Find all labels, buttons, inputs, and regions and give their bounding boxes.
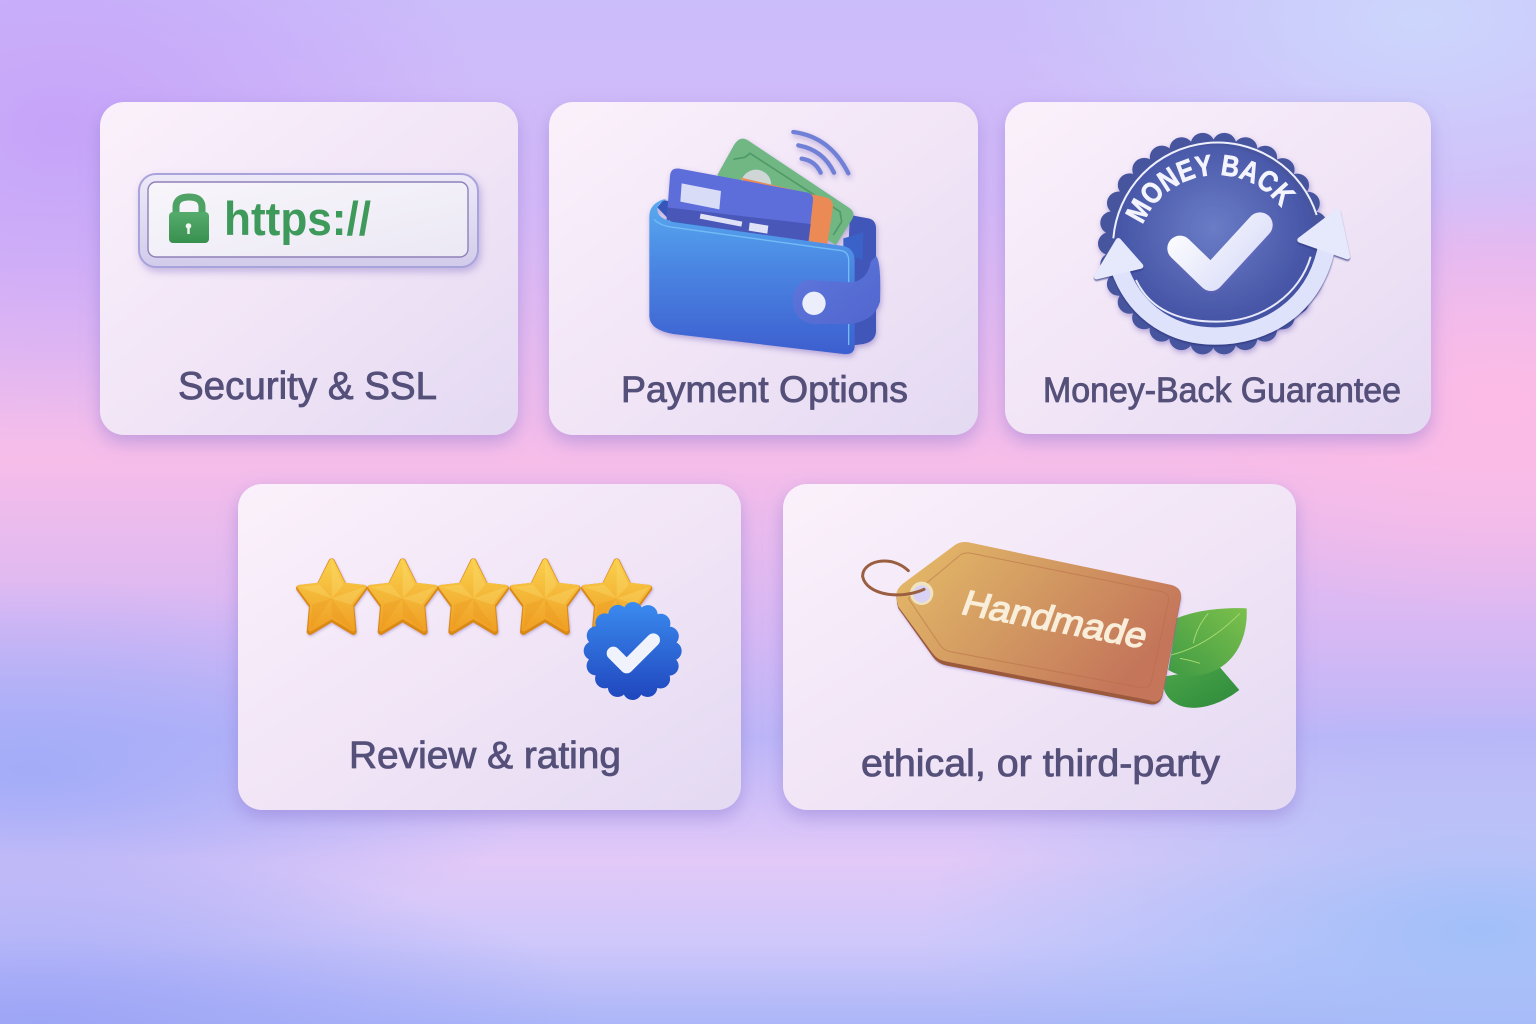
icon: https address bar with padlock: https:// (224, 192, 371, 245)
panel: Payment Options (549, 102, 978, 435)
panel: Security & SSL (100, 102, 518, 435)
panel: ethical, or third-party (783, 484, 1296, 810)
icon: handmade wooden tag with leaves (863, 542, 1247, 708)
card background (100, 102, 518, 435)
panel: Review & rating (238, 484, 741, 810)
panel: Money-Back Guarantee (996, 101, 1440, 450)
label: Payment Options: Payment Options (621, 369, 908, 410)
icon: https address bar with padlock (139, 174, 478, 267)
label: ethical, or third-party: ethical, or third-party (861, 743, 1220, 785)
card background (783, 484, 1296, 810)
icon: money back seal with check and arrows (1093, 132, 1351, 360)
icon: wallet with cards, cash and contactless waves (649, 132, 880, 354)
label: Security & SSL: Security & SSL (178, 365, 437, 408)
icon: money back seal with check and arrows: MONEY BACK (1125, 154, 1297, 224)
icon: five gold stars with verified badge (299, 561, 675, 694)
card background (1005, 102, 1431, 434)
card background (549, 102, 978, 435)
icon: handmade wooden tag with leaves: Handmade (957, 583, 1154, 656)
card background (238, 484, 741, 810)
label: Money-Back Guarantee: Money-Back Guarantee (1043, 371, 1401, 410)
label: Review & rating: Review & rating (349, 735, 621, 777)
